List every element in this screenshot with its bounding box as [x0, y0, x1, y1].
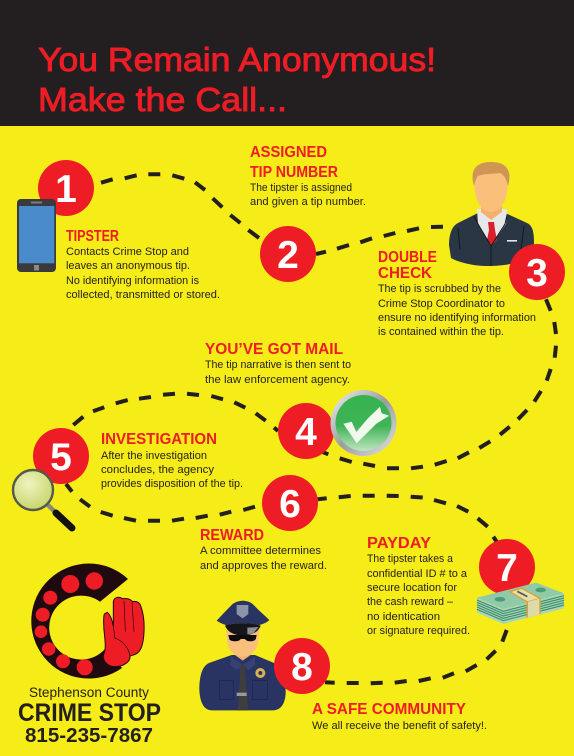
number 3	[509, 244, 565, 300]
step 1: tipster	[17, 160, 220, 301]
text: double check	[378, 249, 536, 338]
number 8: 8	[291, 646, 313, 689]
text: reward: and approves the reward.	[200, 560, 327, 572]
text: investigation	[101, 431, 243, 490]
header band	[0, 0, 574, 126]
text: reward: REWARD	[200, 527, 264, 544]
text: assigned tip number: and given a tip number.	[250, 196, 366, 208]
title	[38, 41, 436, 118]
number 1: 1	[55, 168, 77, 211]
step 8: a safe community	[199, 601, 487, 732]
text: double check: is contained within the tip.	[378, 326, 504, 338]
text: double check: The tip is scrubbed by the	[378, 283, 501, 295]
number 2: 2	[277, 234, 299, 277]
text: tipster	[66, 228, 220, 301]
text: payday: secure location for	[367, 582, 457, 594]
step 6: reward	[200, 475, 327, 572]
step 2: assigned tip number	[250, 144, 366, 282]
number 7: 7	[496, 547, 518, 590]
text: payday	[367, 535, 470, 637]
text: a safe community	[312, 701, 487, 732]
title: Make the Call...	[38, 81, 287, 118]
text: tipster: collected, transmitted or stored.	[66, 289, 220, 301]
text: reward	[200, 527, 327, 572]
text: you've got mail: the law enforcement agency.	[205, 374, 350, 386]
step 4: you've got mail	[205, 341, 396, 459]
number 8	[274, 638, 330, 694]
text: tipster: No identifying information is	[66, 275, 199, 287]
text: payday: the cash reward –	[367, 596, 454, 608]
text: double check: Crime Stop Coordinator to	[378, 298, 505, 310]
text: investigation: After the investigation	[101, 450, 207, 462]
text: payday: PAYDAY	[367, 535, 431, 552]
number 6: 6	[279, 483, 301, 526]
number 1	[38, 160, 94, 216]
text: investigation: provides disposition of the tip.	[101, 478, 243, 490]
icon: smartphone	[17, 199, 56, 272]
text: tipster: leaves an anonymous tip.	[66, 260, 190, 272]
logo text: organisation and phone: CRIME STOP	[18, 699, 161, 727]
step 7: payday	[367, 535, 564, 637]
text: you've got mail: YOU’VE GOT MAIL	[205, 341, 343, 358]
logo text: organisation and phone	[18, 685, 161, 747]
number 4: 4	[295, 411, 317, 454]
text: payday: The tipster takes a	[367, 553, 454, 565]
crime stop logo	[18, 564, 161, 747]
number 5	[33, 428, 89, 484]
icon: green check button	[330, 390, 396, 456]
text: double check: ensure no identifying information	[378, 312, 536, 324]
text: a safe community: We all receive the benefit of safety!.	[312, 720, 487, 732]
dashed route	[66, 174, 556, 683]
text: reward: A committee determines	[200, 545, 322, 557]
text: payday: or signature required.	[367, 625, 470, 637]
number 4	[278, 403, 334, 459]
text: double check: CHECK	[378, 265, 432, 282]
icon: police officer	[199, 601, 286, 710]
text: assigned tip number: ASSIGNED	[250, 144, 327, 161]
icon: magnifying glass	[13, 470, 72, 528]
text: tipster: Contacts Crime Stop and	[66, 246, 189, 258]
text: you've got mail: The tip narrative is then sent to	[205, 359, 351, 371]
text: investigation: concludes, the agency	[101, 464, 215, 476]
text: assigned tip number: The tipster is assigned	[250, 182, 352, 194]
text: payday: no identication	[367, 611, 440, 623]
logo text: organisation and phone: Stephenson County	[29, 685, 149, 700]
number 3: 3	[526, 252, 548, 295]
number 5: 5	[50, 436, 72, 479]
step 5: investigation	[13, 428, 243, 528]
text: payday: confidential ID # to a	[367, 568, 468, 580]
text: you've got mail	[205, 341, 351, 386]
text: double check: DOUBLE	[378, 249, 437, 266]
icon: stack of cash	[477, 583, 564, 624]
text: assigned tip number	[250, 144, 366, 208]
text: assigned tip number: TIP NUMBER	[250, 164, 338, 181]
text: a safe community: A SAFE COMMUNITY	[312, 701, 466, 718]
step 3: double check	[378, 162, 565, 338]
icon: businessman	[449, 162, 534, 266]
number 7	[479, 539, 535, 595]
text: tipster: TIPSTER	[66, 228, 119, 245]
logo mark: ring and stop hand	[31, 564, 144, 679]
text: investigation: INVESTIGATION	[101, 431, 217, 448]
title: You Remain Anonymous!	[38, 41, 436, 78]
logo text: organisation and phone: 815-235-7867	[25, 725, 153, 747]
